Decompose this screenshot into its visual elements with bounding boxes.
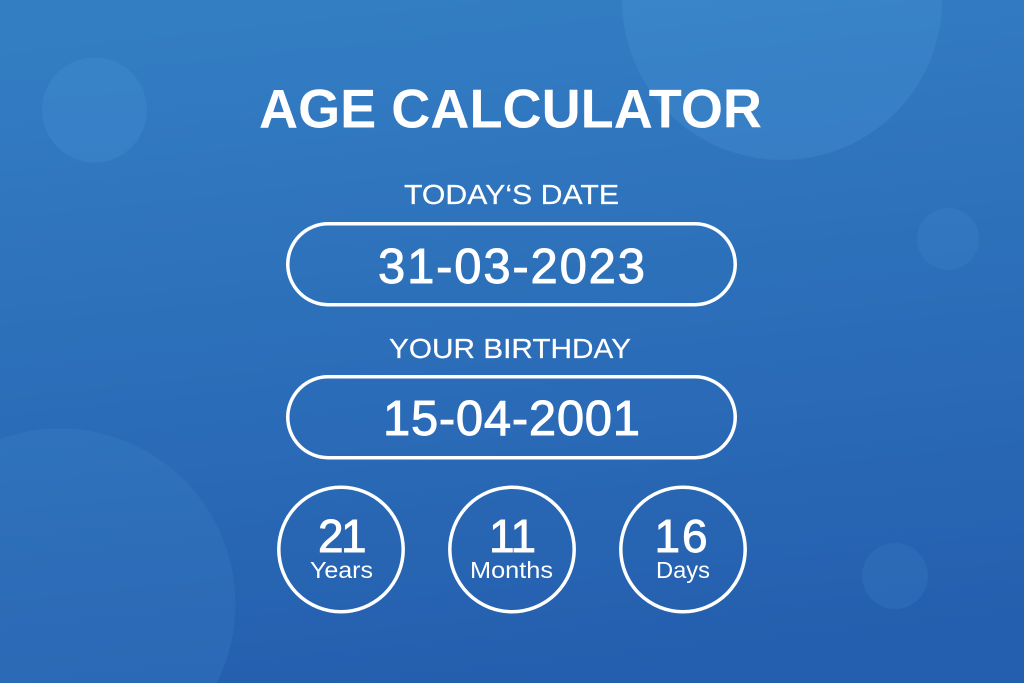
today's date group (288, 179, 735, 305)
label: your birthday: YOUR BIRTHDAY (389, 333, 631, 364)
birthday group (288, 333, 735, 458)
result: days (621, 487, 745, 612)
title: AGE CALCULATOR (259, 78, 762, 140)
input pill: your birthday (288, 377, 735, 458)
result: years: Years (310, 557, 373, 583)
result: days: Days (656, 557, 710, 583)
value: today's date: 31-03-2023 (378, 240, 645, 294)
input pill: today's date (288, 224, 735, 305)
result: days: 16 (654, 510, 708, 562)
result: months (450, 487, 574, 612)
result: years (279, 487, 403, 612)
label: today's date: TODAY‘S DATE (404, 179, 619, 210)
value: your birthday: 15-04-2001 (383, 392, 640, 446)
result: years: 21 (318, 510, 367, 562)
result: months: Months (470, 557, 553, 583)
result: months: 11 (489, 510, 536, 562)
